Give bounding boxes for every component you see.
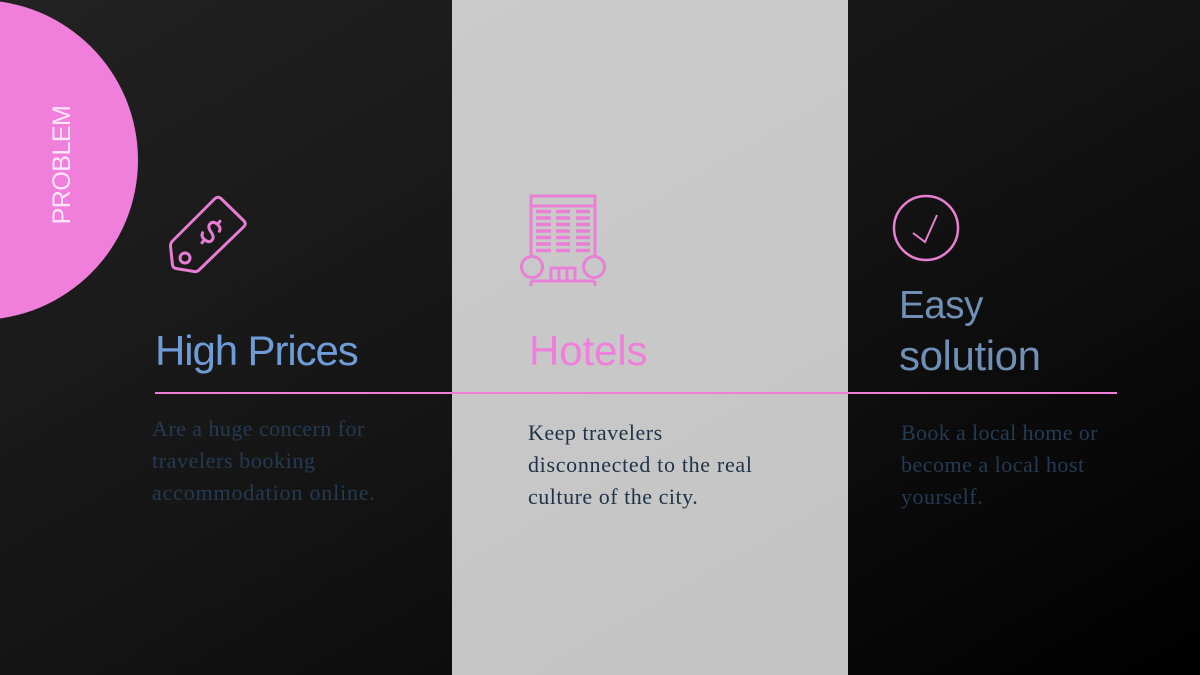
text: high prices description: travelers booking — [152, 448, 316, 473]
heading: Easy solution: Easy — [899, 284, 983, 327]
text: easy solution description: Book a local home or — [901, 420, 1098, 445]
badge label: PROBLEM — [48, 106, 76, 224]
text: hotels description — [528, 420, 753, 509]
heading: Easy solution: solution — [899, 332, 1041, 379]
icon: check circle — [892, 194, 960, 262]
text: hotels description: disconnected to the real — [528, 452, 753, 477]
heading: High Prices: High Prices — [155, 327, 358, 374]
text: easy solution description: become a local host — [901, 452, 1085, 477]
divider line — [155, 392, 1117, 394]
icon: hotel building — [520, 194, 606, 286]
text: hotels description: culture of the city. — [528, 484, 698, 509]
text: easy solution description — [901, 420, 1098, 509]
text: high prices description: Are a huge concern for — [152, 416, 365, 441]
heading: Hotels: Hotels — [529, 327, 647, 374]
text: high prices description — [152, 416, 376, 505]
heading: Easy solution — [899, 284, 1041, 379]
text: hotels description: Keep travelers — [528, 420, 663, 445]
icon: price tag — [169, 196, 247, 274]
text: high prices description: accommodation online. — [152, 480, 376, 505]
panel: center column — [452, 0, 848, 675]
text: easy solution description: yourself. — [901, 484, 983, 509]
problem badge circle — [0, 0, 138, 320]
